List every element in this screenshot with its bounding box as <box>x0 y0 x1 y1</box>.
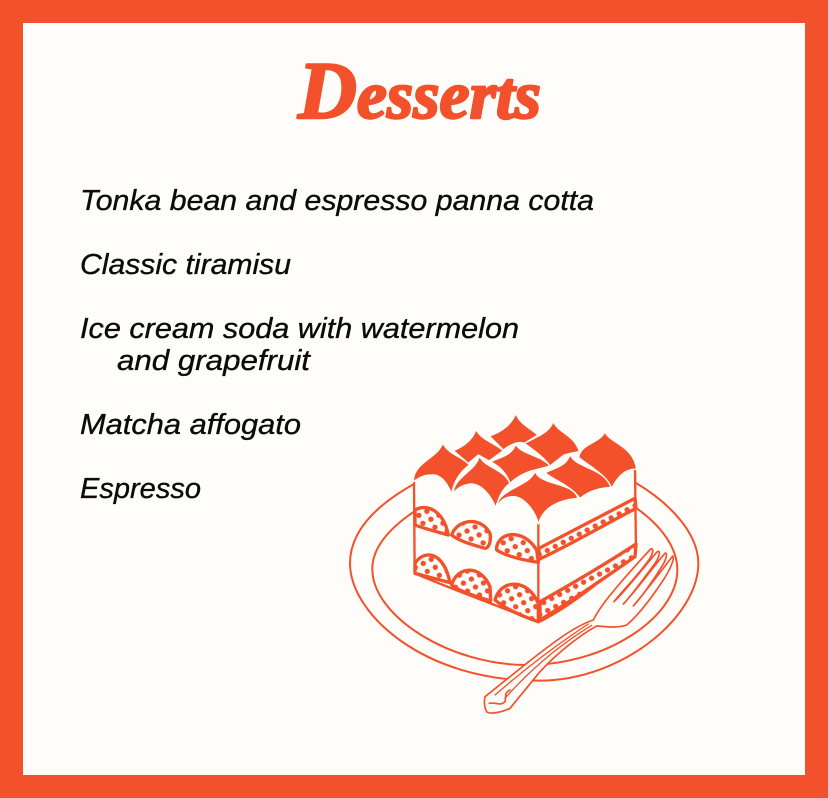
ladyfinger sponges <box>415 498 636 622</box>
fork <box>484 549 673 713</box>
menu item: ice cream soda: Ice cream soda with watermelon <box>80 313 519 345</box>
menu item: ice cream soda <box>80 313 519 377</box>
title: Desserts <box>297 45 541 136</box>
cake body <box>414 420 636 622</box>
menu item: affogato: Matcha affogato <box>80 409 301 441</box>
illustration: tiramisu on a plate with fork <box>350 413 698 713</box>
menu item: espresso: Espresso <box>80 473 201 505</box>
menu item: ice cream soda: and grapefruit <box>117 345 312 377</box>
menu item: tiramisu: Classic tiramisu <box>80 249 291 281</box>
menu item: panna cotta: Tonka bean and espresso panna cotta <box>80 185 594 217</box>
plate <box>350 483 698 681</box>
menu list <box>80 185 594 505</box>
cream topping <box>413 413 637 524</box>
